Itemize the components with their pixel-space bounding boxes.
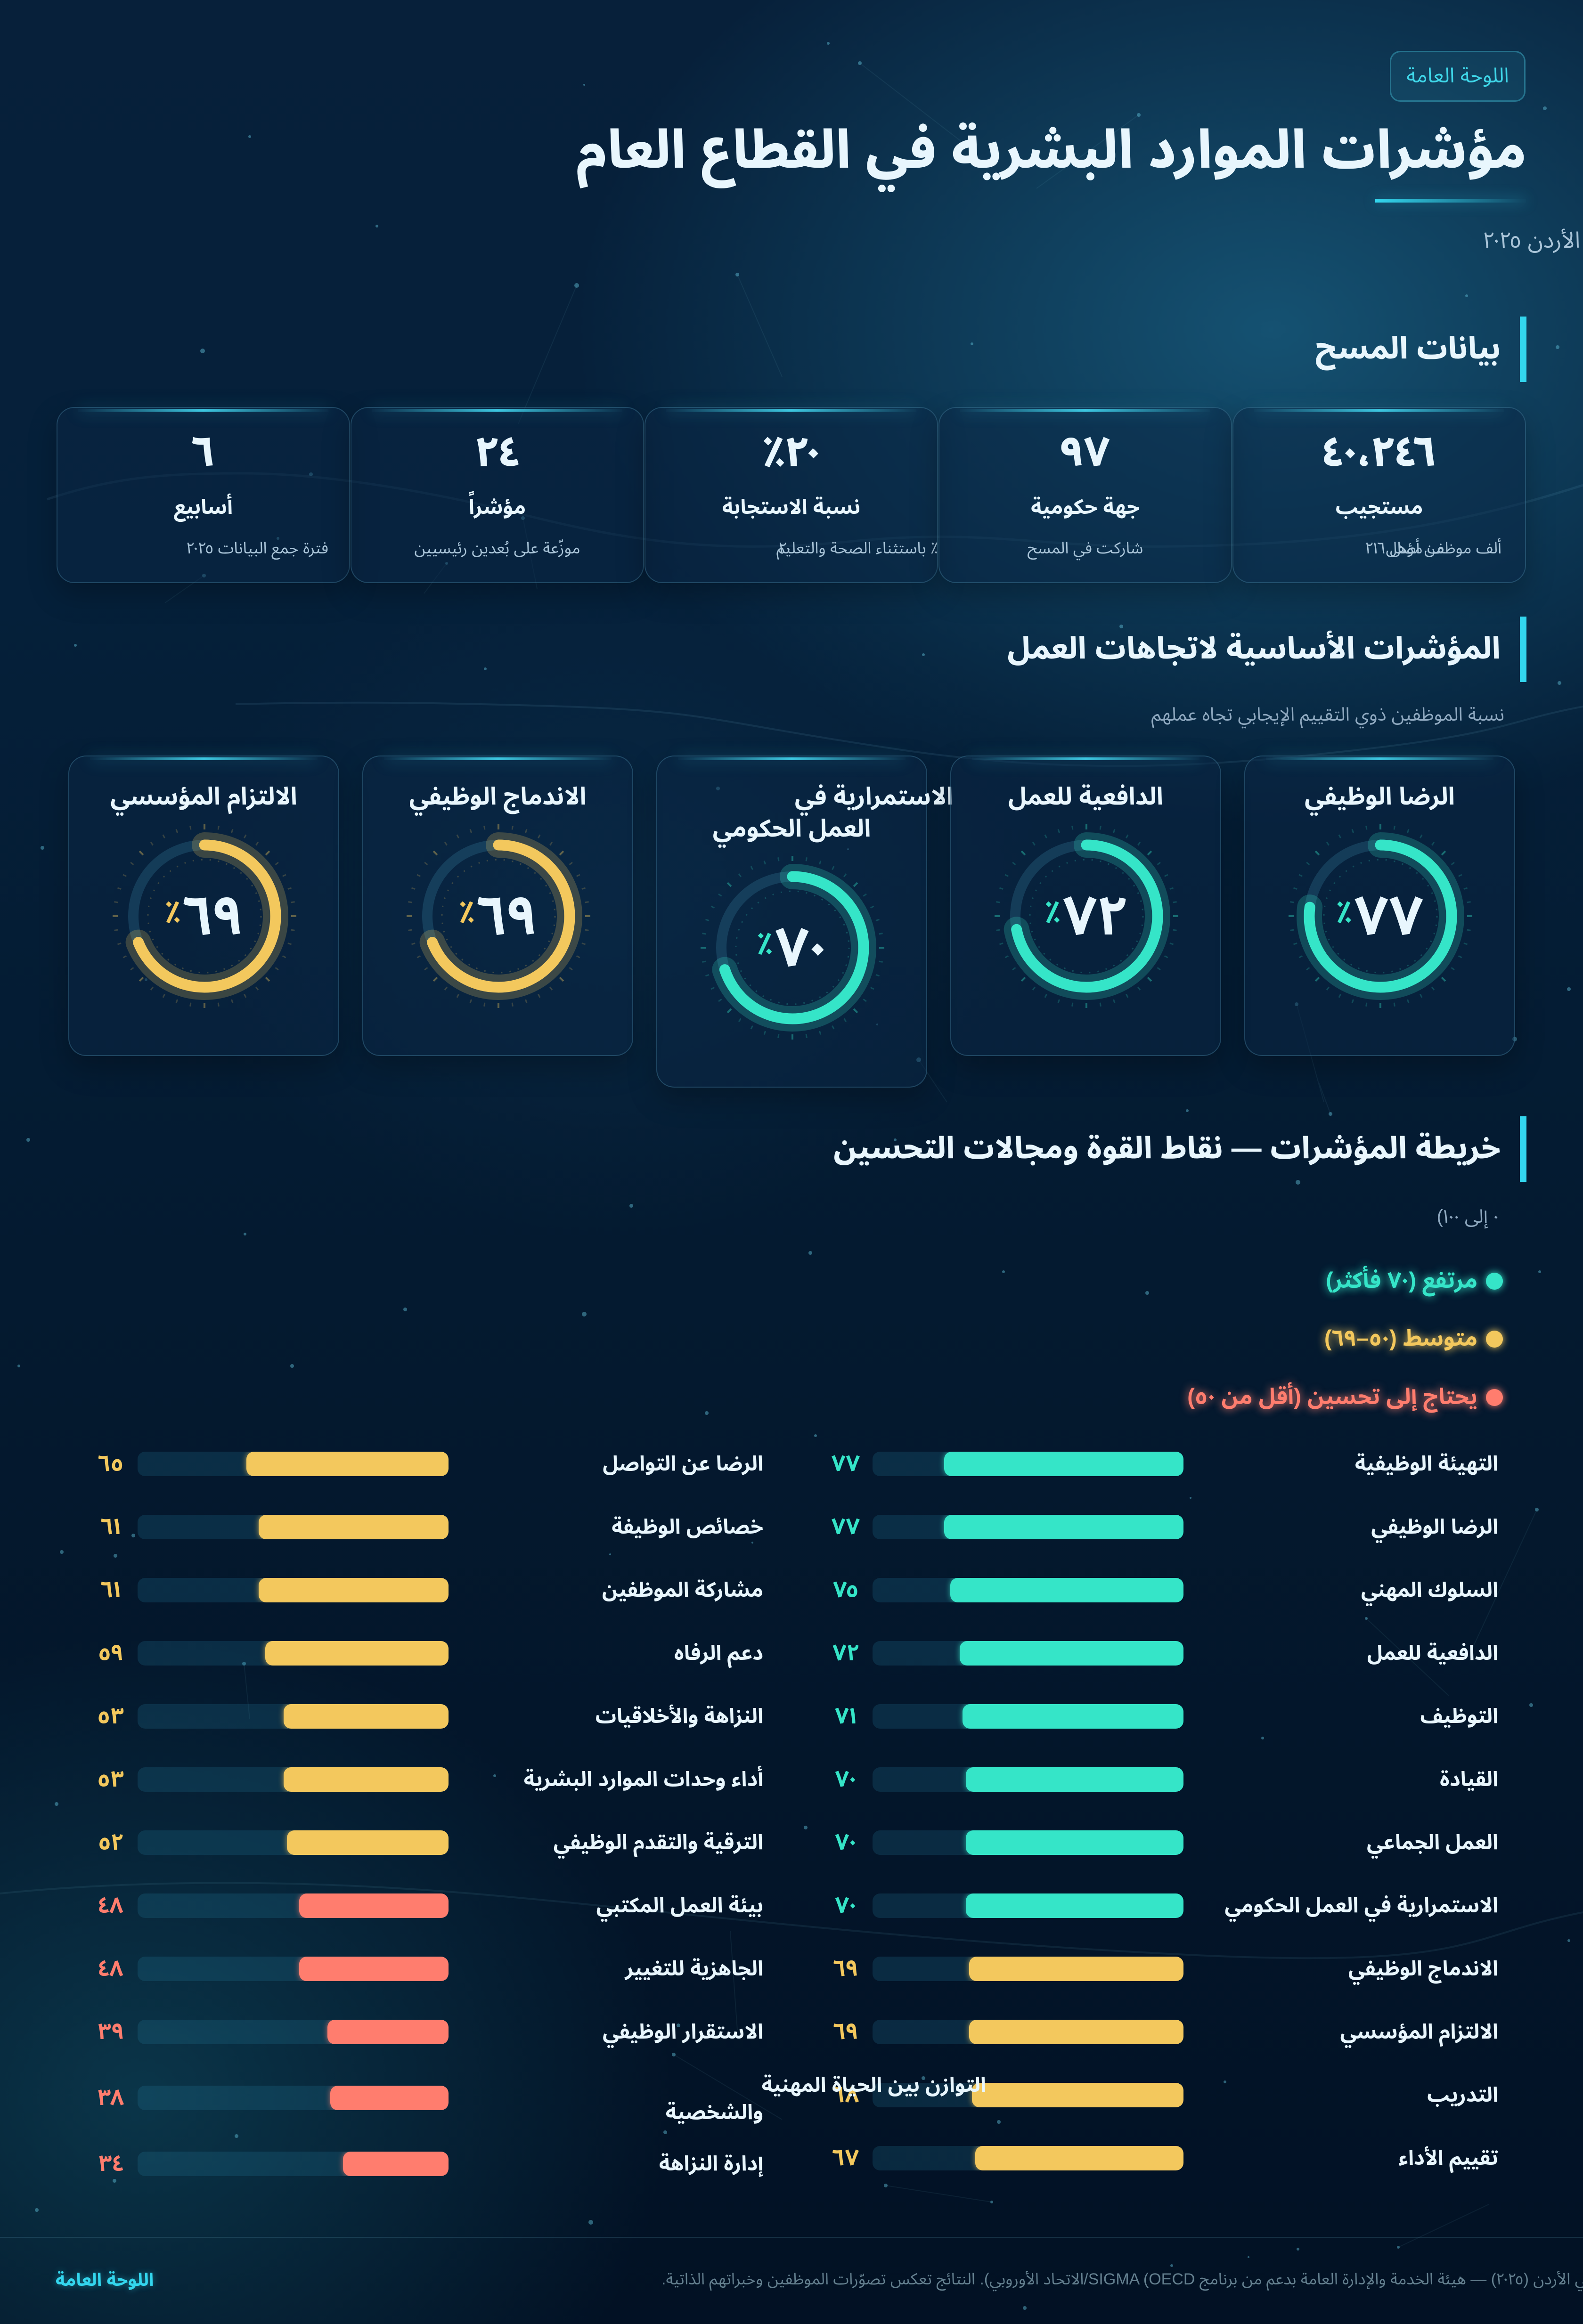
panel: gauge engagement xyxy=(362,756,633,1056)
row: office environment 48: ٤٨ xyxy=(98,1893,123,1918)
gauge title: الالتزام المؤسسي xyxy=(110,783,297,810)
stat card: entities xyxy=(938,407,1232,583)
text: التوازن بين الحياة المهنية xyxy=(762,2073,986,2096)
gauge title: الاندماج الوظيفي xyxy=(409,783,586,810)
stat card: response rate xyxy=(645,407,938,583)
panel: gauge motivation xyxy=(950,756,1221,1056)
row: professional conduct 75: ٧٥ xyxy=(833,1577,858,1602)
row: hr units 53: ٥٣ xyxy=(98,1767,124,1792)
chart: indicators right column xyxy=(820,1452,1498,2170)
row: performance 67: ٦٧ xyxy=(832,2145,859,2170)
row: teamwork 70: العمل الجماعي xyxy=(1367,1831,1498,1854)
stat card: weeks: ٦ xyxy=(192,428,215,475)
row: onboarding 77: ٧٧ xyxy=(831,1451,860,1476)
row: engagement 69 xyxy=(820,1957,1498,1981)
legend item: high xyxy=(1102,1267,1526,1295)
panel: gauge institutional commitment xyxy=(68,756,339,1056)
row: motivation 72 xyxy=(820,1641,1498,1666)
row: change readiness 48 xyxy=(85,1957,763,1981)
subtitle: الأردن ٢٠٢٥ xyxy=(1483,228,1580,253)
gauge ring 69 xyxy=(395,813,602,1020)
gauge title line one: الاستمرارية في xyxy=(795,783,953,810)
row: teamwork 70: ٧٠ xyxy=(835,1830,857,1855)
row: job characteristics 61 xyxy=(85,1515,763,1539)
title: مؤشرات الموارد البشرية في القطاع العام xyxy=(577,120,1526,179)
row: integrity management 34: إدارة النزاهة xyxy=(659,2152,763,2175)
stat card: response rate: ٪ باستثناء الصحة والتعليم xyxy=(776,539,938,557)
chart: indicators left column: والشخصية xyxy=(666,2101,763,2124)
row: promotion 52: ٥٢ xyxy=(98,1830,123,1855)
row: teamwork 70 xyxy=(820,1830,1498,1855)
row: engagement 69: ٦٩ xyxy=(833,1956,858,1981)
row: integrity management 34 xyxy=(85,2152,763,2176)
legend xyxy=(1131,1267,1526,1413)
legend item: needs improvement xyxy=(1102,1383,1526,1412)
footer brand: اللوحة العامة xyxy=(56,2270,154,2290)
row: job stability 39: الاستقرار الوظيفي xyxy=(603,2020,763,2043)
row: job characteristics 61: ٦١ xyxy=(101,1514,121,1539)
row: office environment 48 xyxy=(85,1893,763,1918)
row: motivation 72: ٧٢ xyxy=(832,1641,859,1666)
row: job satisfaction 77: الرضا الوظيفي xyxy=(1371,1515,1498,1538)
gauge value: ٦٩٪ xyxy=(164,885,243,946)
text: scale note: ٠ إلى ١٠٠) xyxy=(1437,1206,1499,1227)
row: commitment 69: الالتزام المؤسسي xyxy=(1340,2020,1498,2043)
row: work life balance 38: ٣٨ xyxy=(97,2085,124,2110)
row: work life balance 38 xyxy=(85,2086,763,2110)
row: continuity 70 xyxy=(820,1893,1498,1918)
stat card: entities: شاركت في المسح xyxy=(1028,539,1143,557)
stat card: indicators xyxy=(351,407,644,583)
stat card: respondents: مستجيب xyxy=(1336,496,1423,519)
stat card: response rate: نسبة الاستجابة xyxy=(722,496,860,519)
chip: overview label xyxy=(1390,51,1526,102)
row: training 68 xyxy=(820,2083,1498,2107)
stat card: response rate: ٢٠ xyxy=(779,539,791,557)
row: training 68: ٦٨ xyxy=(832,2082,859,2107)
chart: indicators left column xyxy=(85,1452,763,2176)
row: recruitment 71 xyxy=(820,1704,1498,1729)
row: change readiness 48: ٤٨ xyxy=(98,1956,123,1981)
stat card: indicators: مؤشراً xyxy=(469,496,526,519)
row: continuity 70: الاستمرارية في العمل الحكومي xyxy=(1224,1894,1498,1917)
stat card: weeks xyxy=(57,407,350,583)
row: employee participation 61: مشاركة الموظفين xyxy=(602,1578,763,1601)
row: integrity management 34: ٣٤ xyxy=(98,2151,123,2176)
row: communication 65: الرضا عن التواصل xyxy=(603,1452,763,1475)
stat card: entities: ٩٧ xyxy=(1061,428,1110,475)
row: welfare 59 xyxy=(85,1641,763,1666)
row: employee participation 61: ٦١ xyxy=(101,1577,121,1602)
stat card: indicators: موزّعة على بُعدين رئيسيين xyxy=(414,539,580,557)
row: recruitment 71: التوظيف xyxy=(1420,1705,1498,1728)
stat card: respondents xyxy=(1232,407,1526,583)
row: promotion 52 xyxy=(85,1830,763,1855)
row: leadership 70: ٧٠ xyxy=(835,1767,857,1792)
chip: overview label: اللوحة العامة xyxy=(1406,64,1509,87)
stat card: response rate: ٢٠٪ xyxy=(762,428,821,475)
row: job satisfaction 77: ٧٧ xyxy=(831,1514,860,1539)
row: engagement 69: الاندماج الوظيفي xyxy=(1348,1957,1498,1980)
gauge title: الرضا الوظيفي xyxy=(1305,783,1455,810)
gauge ring 77 xyxy=(1277,813,1484,1020)
heading: survey data: بيانات المسح xyxy=(1315,331,1501,365)
legend item: high: مرتفع (٧٠ فأكثر) xyxy=(1326,1268,1477,1293)
stat card: respondents: من أصل ٢١٦ xyxy=(1365,539,1444,557)
row: continuity 70: ٧٠ xyxy=(835,1893,857,1918)
gauge value: ٧٢٪ xyxy=(1044,885,1127,946)
stat card: weeks: أسابيع xyxy=(174,496,233,519)
title accent bar xyxy=(1375,199,1526,203)
gauge ring 72 xyxy=(983,813,1190,1020)
legend item: needs improvement: يحتاج إلى تحسين (أقل من ٥٠) xyxy=(1187,1384,1477,1409)
footer xyxy=(0,2237,1583,2324)
row: integrity and ethics 53: النزاهة والأخلاقيات xyxy=(596,1705,763,1728)
text: core indicators note: نسبة الموظفين ذوي التقييم الإيجابي تجاه عملهم xyxy=(1151,704,1504,725)
row: onboarding 77 xyxy=(820,1452,1498,1476)
stat card: weeks: فترة جمع البيانات ٢٠٢٥ xyxy=(187,539,328,557)
stat card: respondents: ٤٠،٢٤٦ xyxy=(1322,428,1436,475)
heading: core indicators: المؤشرات الأساسية لاتجاهات العمل xyxy=(1007,631,1501,665)
row: job stability 39: ٣٩ xyxy=(98,2019,124,2044)
panel: gauge job satisfaction xyxy=(1244,756,1515,1056)
heading: survey data xyxy=(660,317,1526,382)
gauge title line two: العمل الحكومي xyxy=(713,815,871,842)
row: job stability 39 xyxy=(85,2020,763,2044)
row: commitment 69: ٦٩ xyxy=(833,2019,858,2044)
row: performance 67 xyxy=(820,2146,1498,2170)
stat card: respondents: ألف موظف مؤهل xyxy=(1386,539,1501,557)
row: integrity and ethics 53 xyxy=(85,1704,763,1729)
row: leadership 70 xyxy=(820,1767,1498,1792)
gauge value: ٦٩٪ xyxy=(458,885,537,946)
gauge value: ٧٠٪ xyxy=(757,917,827,978)
row: hr units 53 xyxy=(85,1767,763,1792)
row: integrity and ethics 53: ٥٣ xyxy=(98,1704,124,1729)
legend item: medium xyxy=(1102,1325,1526,1353)
row: promotion 52: الترقية والتقدم الوظيفي xyxy=(554,1831,763,1854)
panel: gauge continuity xyxy=(656,756,927,1088)
row: employee participation 61 xyxy=(85,1578,763,1602)
row: welfare 59: ٥٩ xyxy=(98,1641,123,1666)
row: training 68: التدريب xyxy=(1427,2083,1498,2106)
row: recruitment 71: ٧١ xyxy=(835,1704,857,1729)
row: communication 65: ٦٥ xyxy=(98,1451,123,1476)
legend item: medium: متوسط (٥٠–٦٩) xyxy=(1324,1326,1477,1351)
row: welfare 59: دعم الرفاه xyxy=(674,1641,763,1665)
row: job satisfaction 77 xyxy=(820,1515,1498,1539)
row: leadership 70: القيادة xyxy=(1440,1768,1498,1791)
row: change readiness 48: الجاهزية للتغيير xyxy=(625,1957,763,1980)
row: motivation 72: الدافعية للعمل xyxy=(1367,1641,1498,1665)
row: office environment 48: بيئة العمل المكتبي xyxy=(596,1894,763,1917)
row: onboarding 77: التهيئة الوظيفية xyxy=(1355,1452,1498,1475)
row: communication 65 xyxy=(85,1452,763,1476)
panel: survey stats xyxy=(57,407,1526,583)
row: job characteristics 61: خصائص الوظيفة xyxy=(612,1515,763,1538)
row: professional conduct 75 xyxy=(820,1578,1498,1602)
stat card: entities: جهة حكومية xyxy=(1031,496,1140,519)
stat card: indicators: ٢٤ xyxy=(475,428,519,475)
heading: indicator map: خريطة المؤشرات — نقاط القوة ومجالات التحسين xyxy=(833,1131,1501,1165)
gauge value: ٧٧٪ xyxy=(1336,885,1424,946)
row: commitment 69 xyxy=(820,2020,1498,2044)
gauge ring 70 xyxy=(689,844,896,1051)
heading: indicator map xyxy=(660,1116,1526,1182)
row: performance 67: تقييم الأداء xyxy=(1398,2146,1498,2170)
row: hr units 53: أداء وحدات الموارد البشرية xyxy=(524,1768,763,1791)
gauge ring 69 xyxy=(101,813,308,1020)
heading: core indicators xyxy=(660,617,1526,682)
row: professional conduct 75: السلوك المهني xyxy=(1361,1578,1498,1601)
gauge title: الدافعية للعمل xyxy=(1008,783,1163,810)
